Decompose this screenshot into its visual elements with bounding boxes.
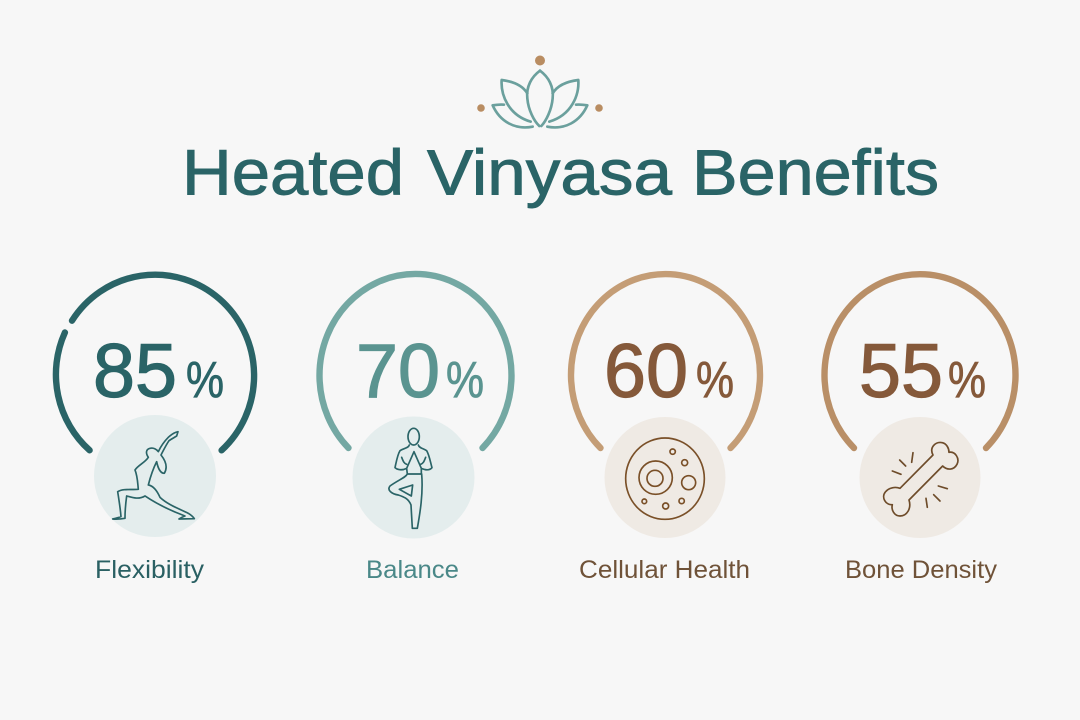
label: Cellular Health (579, 556, 750, 584)
value: 70%: 70 (356, 329, 440, 414)
panel: bone density (825, 274, 1016, 584)
icon badge: tree pose (352, 416, 474, 538)
value: 60%: 60 (604, 329, 688, 414)
value: 55% (859, 329, 986, 414)
icon badge: cell (604, 417, 726, 538)
panel: flexibility (56, 275, 254, 584)
ring: 55% (825, 274, 1016, 448)
ring: 70% (320, 274, 512, 448)
ring: 85% (56, 275, 254, 450)
icon: lotus (477, 56, 603, 127)
icon badge: warrior pose (94, 415, 216, 537)
label: Balance (366, 556, 459, 584)
value: 55%: % (948, 351, 986, 408)
value: 70%: % (446, 351, 484, 408)
panel: balance (320, 274, 512, 584)
label: Bone Density (845, 556, 998, 584)
title: Benefits (692, 136, 939, 208)
title: Vinyasa (427, 136, 672, 208)
value: 55%: 55 (859, 329, 943, 414)
icon badge: bone (860, 417, 980, 538)
title: Heated (182, 136, 404, 208)
value: 60% (604, 329, 734, 414)
ring: 60% (571, 274, 760, 448)
label: Flexibility (95, 556, 205, 584)
title (182, 136, 939, 208)
value: 85%: 85 (93, 329, 177, 414)
value: 70% (356, 329, 484, 414)
value: 85% (93, 329, 224, 414)
value: 60%: % (696, 351, 734, 408)
panel: cellular health (571, 274, 760, 584)
value: 85%: % (186, 351, 224, 408)
